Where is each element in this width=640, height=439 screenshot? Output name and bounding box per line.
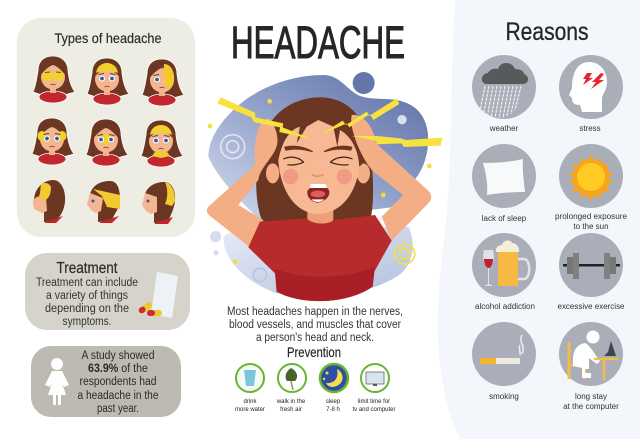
reason: weather: weather bbox=[489, 124, 519, 133]
cheeks bbox=[283, 169, 298, 184]
treatment text: a variety of things bbox=[46, 290, 128, 302]
reason: excessive exercise: excessive exercise bbox=[558, 302, 625, 311]
reason: sun exposure: prolonged exposure bbox=[555, 212, 628, 221]
prevention: limit screen time: limit time for bbox=[358, 399, 390, 405]
ears bbox=[266, 163, 279, 183]
reason: sun exposure: to the sun bbox=[573, 222, 609, 231]
profile head: back bbox=[142, 182, 175, 224]
heading: treatment: Treatment bbox=[56, 260, 118, 277]
closed eyes bbox=[283, 157, 353, 165]
reason: lack of sleep bbox=[472, 144, 536, 223]
decorative circles bbox=[208, 72, 432, 282]
treatment text: Treatment can include bbox=[36, 277, 138, 289]
heading: reasons: Reasons bbox=[506, 18, 588, 46]
reason: weather bbox=[472, 55, 536, 133]
hair front bbox=[268, 97, 371, 167]
panel: reasons background bbox=[438, 0, 640, 439]
arms and hands bbox=[207, 115, 431, 247]
study text bbox=[78, 350, 158, 415]
heading: prevention: Prevention bbox=[287, 344, 341, 360]
reason: long stay at the computer: at the computer bbox=[563, 402, 619, 411]
lower blob bbox=[223, 227, 413, 293]
prevention: drink water: drink bbox=[243, 399, 257, 405]
title: HEADACHE bbox=[231, 17, 405, 68]
treatment text: symptoms. bbox=[62, 316, 112, 328]
prevention: walk in fresh air bbox=[276, 364, 306, 413]
prevention: sleep: sleep bbox=[326, 399, 341, 405]
reason: excessive exercise bbox=[558, 233, 625, 311]
panel: treatment bbox=[25, 253, 190, 330]
face: nose bridge bbox=[86, 119, 128, 166]
treatment text: depending on the bbox=[45, 303, 129, 315]
reason: alcohol addiction: alcohol addiction bbox=[475, 302, 535, 311]
study text: 63.9% of the bbox=[88, 363, 148, 375]
heading: types of headache: Types of headache bbox=[54, 30, 162, 46]
shirt bbox=[248, 215, 392, 301]
face: forehead and neck bbox=[141, 120, 183, 167]
prevention: limit screen time bbox=[352, 364, 396, 413]
description text bbox=[227, 306, 403, 344]
icon: blister pack and capsules bbox=[138, 272, 178, 318]
prevention: sleep bbox=[320, 364, 348, 413]
mouth bbox=[307, 184, 329, 203]
face: one side of head bbox=[142, 59, 184, 106]
reason: lack of sleep: lack of sleep bbox=[482, 214, 527, 223]
face bbox=[278, 120, 359, 214]
description text: blood vessels, and muscles that cover bbox=[229, 319, 401, 331]
study text: respondents had bbox=[80, 376, 156, 388]
illustration: woman with headache bbox=[207, 72, 442, 301]
reason: long stay at the computer: long stay bbox=[575, 392, 607, 401]
reason: stress: stress bbox=[579, 124, 601, 133]
profile head: top front bbox=[33, 180, 65, 223]
prevention: drink water: more water bbox=[235, 407, 265, 413]
study text: A study showed bbox=[82, 350, 154, 362]
nose bbox=[312, 174, 323, 176]
description text: Most headaches happen in the nerves, bbox=[227, 306, 403, 318]
study text: a headache in the bbox=[78, 390, 158, 402]
prevention: walk in fresh air: walk in the bbox=[276, 399, 306, 405]
eyebrows bbox=[285, 146, 352, 152]
panel: types of headache bbox=[17, 18, 195, 237]
neck bbox=[307, 207, 333, 225]
prevention: limit screen time: tv and computer bbox=[352, 407, 396, 413]
reason: smoking bbox=[472, 322, 536, 401]
profile head: side band bbox=[87, 181, 120, 223]
lightning bolts bbox=[217, 97, 442, 147]
face: both temples and forehead centre bbox=[33, 56, 75, 103]
treatment text bbox=[36, 277, 138, 328]
description text: a person's head and neck. bbox=[256, 332, 374, 344]
reason: smoking: smoking bbox=[489, 392, 519, 401]
reason: sun exposure bbox=[555, 144, 628, 231]
icon: woman figure bbox=[45, 358, 69, 405]
hair back bbox=[256, 97, 373, 223]
study text: past year. bbox=[97, 403, 139, 415]
prevention: sleep: 7-8 h bbox=[326, 407, 340, 413]
prevention: walk in fresh air: fresh air bbox=[280, 407, 302, 413]
reason: stress bbox=[559, 55, 623, 133]
face: temples bbox=[32, 118, 74, 165]
reason: alcohol addiction bbox=[472, 233, 536, 311]
panel: study statistic bbox=[31, 346, 181, 417]
face: forehead band bbox=[87, 58, 129, 105]
background blob bbox=[208, 75, 428, 223]
prevention: drink water bbox=[235, 364, 265, 413]
reason: long stay at the computer bbox=[559, 322, 623, 411]
